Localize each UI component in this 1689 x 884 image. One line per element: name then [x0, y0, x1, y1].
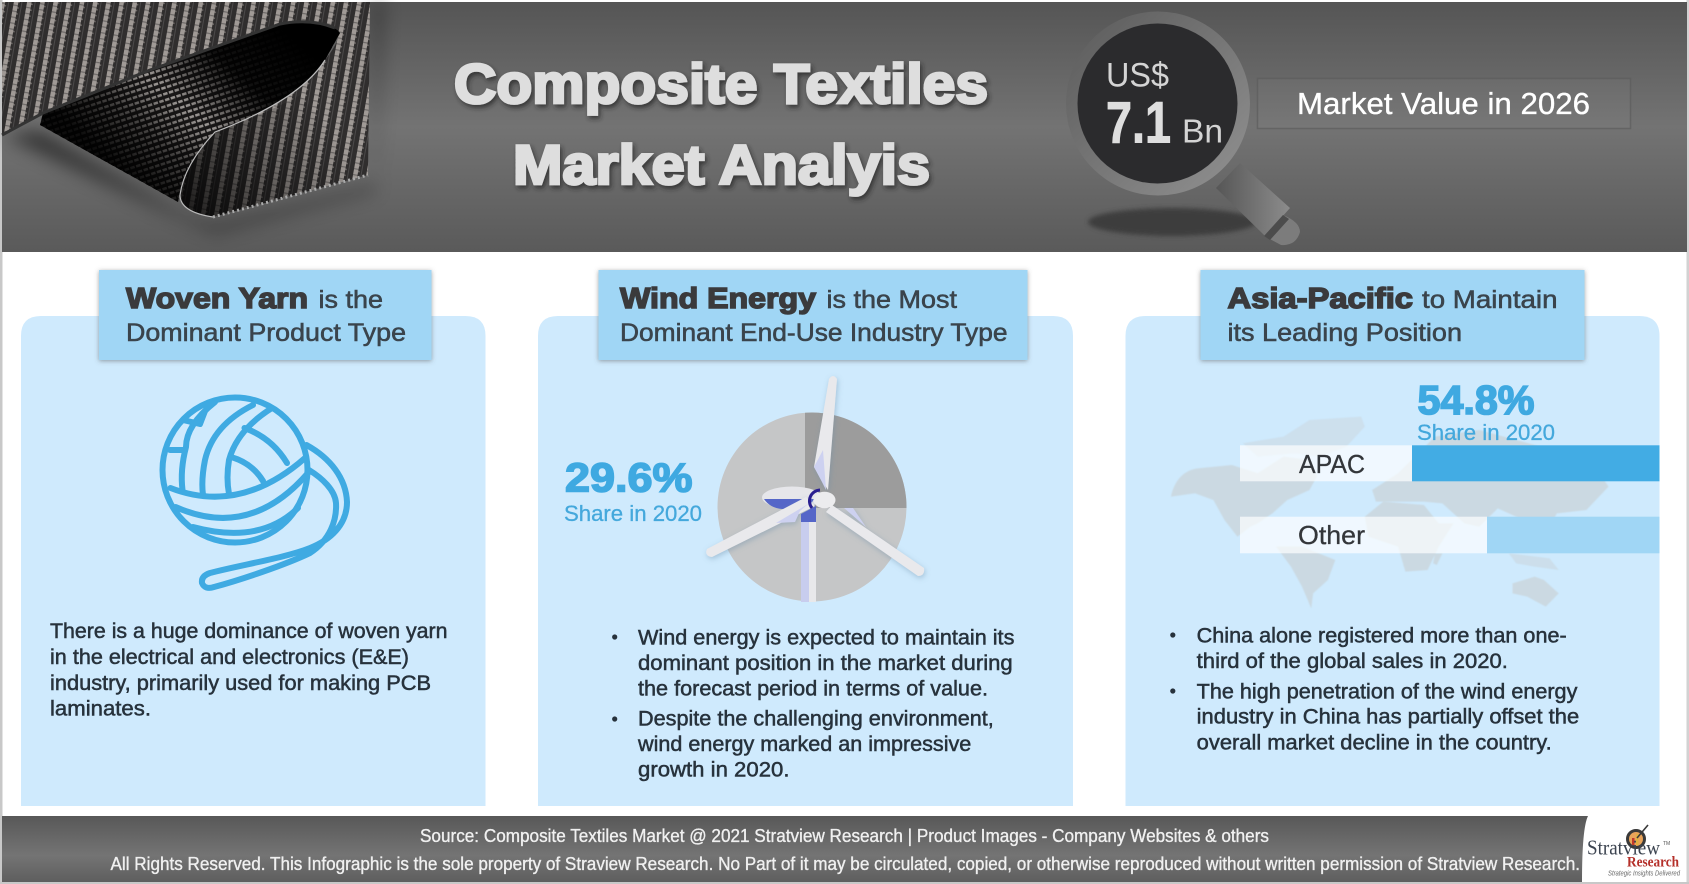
stat: 54.8% share: Share in 2020: [1417, 420, 1555, 445]
stat: 54.8% share: [1417, 377, 1555, 445]
icon: magnifying glass with market value: 7.1: [1106, 90, 1171, 156]
body text: asia-pacific: overall market decline in the country.: [1197, 731, 1552, 754]
icon: magnifying glass with market value: Bn: [1182, 112, 1223, 150]
bar: APAC: APAC: [1299, 449, 1365, 479]
heading: wind energy: Dominant End-Use Industry Type: [620, 319, 1008, 347]
body text: asia-pacific: third of the global sales in 2020.: [1197, 650, 1508, 673]
heading: asia-pacific: its Leading Position: [1228, 319, 1462, 347]
turbine tower: [801, 522, 816, 602]
heading: wind energy: is the Most: [826, 286, 957, 314]
heading: asia-pacific: to Maintain: [1422, 286, 1558, 314]
turbine hub: [809, 490, 836, 508]
body text: wind energy: wind energy marked an impressive: [637, 733, 971, 756]
heading: wind energy: [598, 270, 1028, 360]
callout: market value in 2026: [1258, 78, 1630, 128]
panel: asia-pacific: [1126, 270, 1660, 806]
body text: asia-pacific: The high penetration of the wind energy: [1197, 680, 1578, 703]
stat: 29.6% share: [564, 454, 702, 526]
icon: magnifying glass with market value: [1066, 12, 1300, 245]
panel: wind energy: [538, 270, 1073, 806]
icon: ball of yarn: [162, 398, 347, 588]
title: [454, 52, 988, 196]
body text: wind energy: the forecast period in terms of value.: [638, 677, 988, 700]
heading: woven yarn: Dominant Product Type: [126, 319, 406, 347]
body text: asia-pacific: industry in China has partially offset the: [1197, 705, 1579, 728]
turbine nacelle: [762, 486, 822, 509]
pie chart: wind energy share: [718, 412, 907, 602]
body text: wind energy: Wind energy is expected to maintain its: [638, 626, 1014, 649]
bar chart: regional share: [1240, 445, 1660, 553]
body text: wind energy: [612, 626, 1014, 782]
body text: woven yarn: There is a huge dominance of woven yarn: [50, 620, 448, 643]
heading: wind energy: Wind Energy: [620, 283, 816, 315]
copyright line: All Rights Reserved. This Infographic is the sole property of Straview Research. No Part of it may be circulated, copied, or otherwise reproduced without written permission of Stratview Research.: [110, 854, 1580, 874]
body text: asia-pacific: China alone registered more than one-: [1197, 624, 1567, 647]
body text: wind energy: dominant position in the market during: [638, 652, 1013, 675]
heading: asia-pacific: [1200, 270, 1584, 360]
bar: Other: [1240, 517, 1660, 553]
icon: wind turbine: [706, 376, 924, 602]
heading: woven yarn: [99, 270, 432, 360]
logo: Stratview Research: Stratview: [1587, 835, 1661, 859]
icon: magnifying glass with market value: US$: [1106, 56, 1169, 94]
footer bar: [2, 816, 1588, 882]
body text: woven yarn: industry, primarily used for making PCB: [50, 672, 431, 695]
logo: Stratview Research: [1587, 825, 1681, 878]
heading: woven yarn: Woven Yarn: [126, 283, 308, 315]
heading: asia-pacific: Asia-Pacific: [1228, 283, 1413, 315]
stat: 29.6% share: 29.6%: [565, 454, 692, 500]
bar: APAC: [1240, 445, 1660, 481]
panel: woven yarn: [21, 270, 486, 806]
logo: Stratview Research: TM: [1663, 841, 1670, 847]
title: Market Analyis: [513, 133, 930, 196]
bar: Other: Other: [1298, 520, 1365, 550]
body text: woven yarn: in the electrical and electronics (E&E): [50, 646, 409, 669]
heading: woven yarn: is the: [318, 286, 383, 314]
body text: asia-pacific: [1170, 624, 1579, 754]
turbine blades: [706, 376, 924, 576]
body text: wind energy: Despite the challenging environment,: [638, 708, 994, 731]
title: Composite Textiles: [454, 52, 988, 115]
photo: carbon fibre fabric: [2, 2, 382, 232]
logo icon: target with arrow: [1628, 825, 1648, 848]
logo: Stratview Research: Research: [1627, 855, 1680, 871]
stat: 54.8% share: 54.8%: [1418, 377, 1534, 423]
stat: 29.6% share: Share in 2020: [564, 501, 702, 526]
turbine tower cap: [801, 506, 816, 522]
body text: wind energy: growth in 2020.: [638, 759, 790, 782]
body text: woven yarn: [50, 620, 448, 720]
map: world silhouette: [1171, 417, 1609, 608]
body text: woven yarn: laminates.: [50, 698, 151, 720]
header banner: [2, 2, 1687, 252]
source line: Source: Composite Textiles Market @ 2021 Stratview Research | Product Images - Company Websites & others: [420, 826, 1269, 846]
callout: market value in 2026: Market Value in 2026: [1297, 86, 1590, 121]
